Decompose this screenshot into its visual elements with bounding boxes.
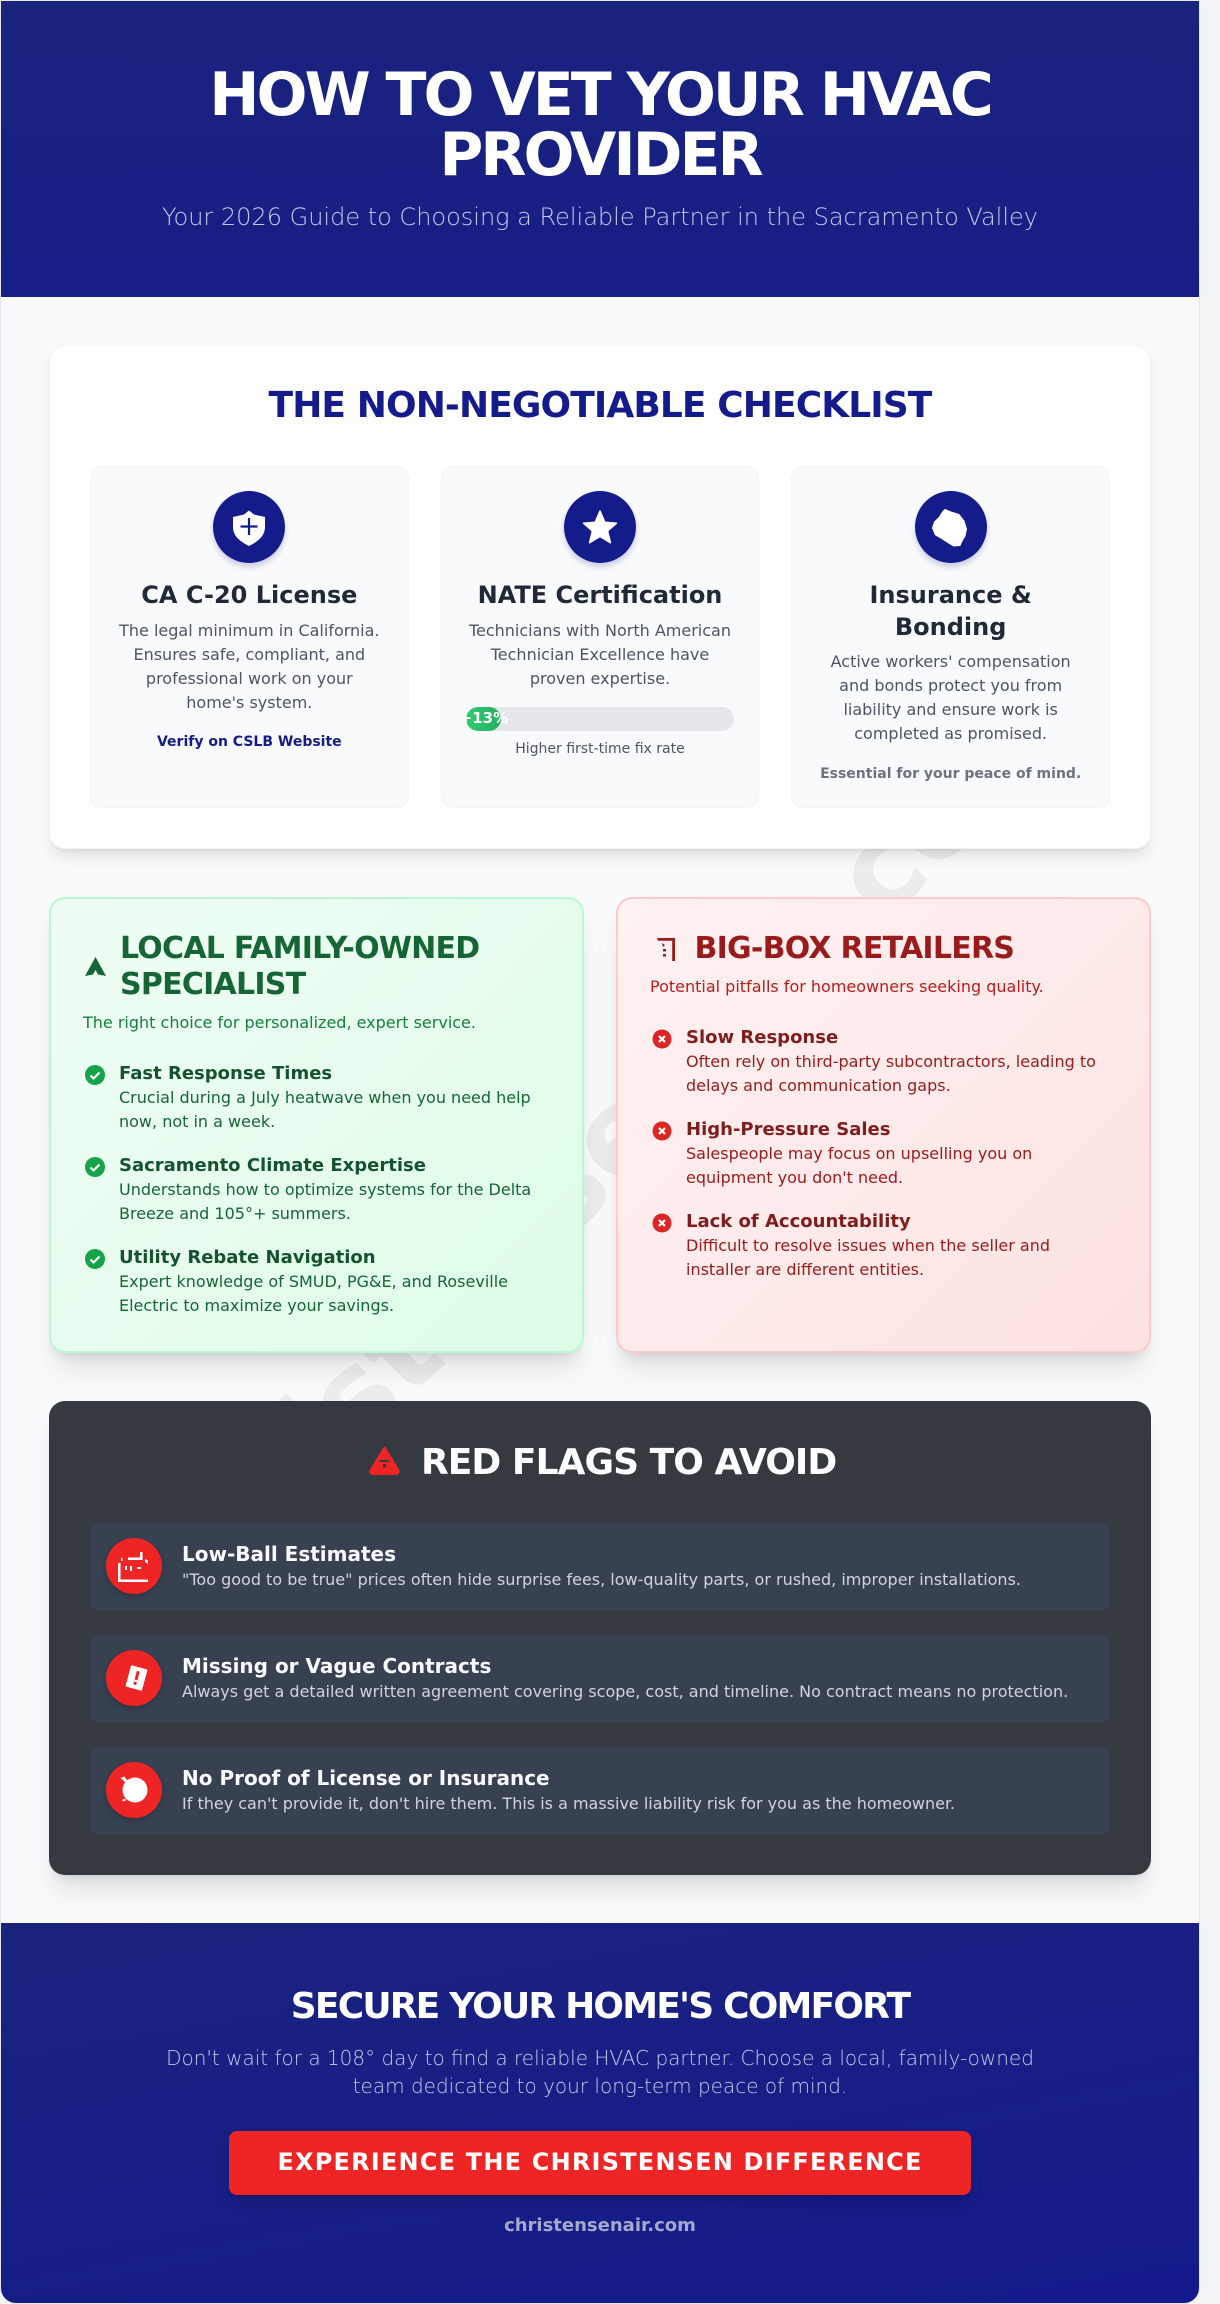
item: lack of accountability	[652, 1211, 1050, 1279]
card title: CA C-20 License	[141, 581, 357, 609]
footer heading: SECURE YOUR HOME'S COMFORT	[291, 1986, 909, 2027]
watermark: christensenair.com	[98, 650, 1101, 1653]
panel heading: SPECIALIST	[120, 967, 305, 1002]
flag: low-ball estimates	[90, 1522, 1110, 1610]
item text: Electric to maximize your savings.	[119, 1296, 394, 1315]
subtitle: Your 2026 Guide to Choosing a Reliable Partner in the Sacramento Valley	[162, 203, 1038, 231]
card description	[830, 652, 1071, 743]
icon: check	[85, 1249, 105, 1269]
icon: blocked badge	[106, 1762, 162, 1818]
panel subtitle: The right choice for personalized, expert service.	[83, 1013, 476, 1032]
icon: shield with plus	[213, 491, 285, 563]
card description: professional work on your	[146, 669, 353, 688]
flag text: Always get a detailed written agreement covering scope, cost, and timeline. No contract means no protection.	[182, 1682, 1068, 1701]
item text: Breeze and 105°+ summers.	[119, 1204, 351, 1223]
panel: big-box retailers	[616, 897, 1151, 1353]
item text	[686, 1144, 1032, 1187]
flag title: No Proof of License or Insurance	[182, 1766, 550, 1790]
website: christensenair.com	[504, 2215, 696, 2236]
card description: Ensures safe, compliant, and	[133, 645, 365, 664]
icon: x	[652, 1122, 672, 1140]
icon: check	[85, 1157, 105, 1177]
card note: Essential for your peace of mind.	[820, 766, 1081, 782]
flag title: Low-Ball Estimates	[182, 1542, 396, 1566]
panel: non-negotiable checklist	[49, 345, 1151, 849]
title: HOW TO VET YOUR HVAC	[209, 60, 991, 130]
item text: Expert knowledge of SMUD, PG&E, and Roseville	[119, 1272, 508, 1291]
flag: vague contracts	[90, 1634, 1110, 1722]
item text: Difficult to resolve issues when the seller and	[686, 1236, 1050, 1255]
card: insurance and bonding	[791, 466, 1110, 808]
card description	[468, 621, 731, 688]
flag text: "Too good to be true" prices often hide surprise fees, low-quality parts, or rushed, improper installations.	[182, 1570, 1021, 1589]
item title: Utility Rebate Navigation	[119, 1247, 376, 1268]
card description: The legal minimum in California.	[119, 621, 380, 640]
footer text: team dedicated to your long-term peace of mind.	[353, 2074, 847, 2098]
panel heading	[120, 931, 479, 1002]
icon: broken store	[657, 938, 675, 961]
card description: home's system.	[186, 693, 312, 712]
card description: and bonds protect you from	[839, 676, 1062, 695]
icon: check	[85, 1065, 105, 1085]
title	[209, 60, 991, 190]
item text	[119, 1180, 531, 1223]
card description: Technicians with North American	[469, 621, 731, 640]
panel heading: BIG-BOX RETAILERS	[694, 931, 1014, 966]
panel heading: LOCAL FAMILY-OWNED	[120, 931, 479, 966]
card description: completed as promised.	[854, 724, 1047, 743]
flag title: Missing or Vague Contracts	[182, 1654, 491, 1678]
icon: document	[106, 1650, 162, 1706]
footer text	[166, 2046, 1034, 2098]
card title	[870, 581, 1032, 641]
item text: now, not in a week.	[119, 1112, 275, 1131]
item title: Sacramento Climate Expertise	[119, 1155, 426, 1176]
item title: Fast Response Times	[119, 1063, 332, 1084]
card description	[119, 621, 380, 712]
item text: installer are different entities.	[686, 1260, 924, 1279]
card description: liability and ensure work is	[843, 700, 1058, 719]
item title: Lack of Accountability	[686, 1211, 911, 1232]
card title: NATE Certification	[478, 581, 722, 609]
panel: local family-owned specialist	[49, 897, 584, 1353]
card description: Active workers' compensation	[831, 652, 1071, 671]
panel heading: RED FLAGS TO AVOID	[421, 1442, 836, 1483]
icon: price tag	[106, 1538, 162, 1594]
item text	[686, 1236, 1050, 1279]
card: NATE certification	[441, 466, 759, 808]
item text: Salespeople may focus on upselling you on	[686, 1144, 1032, 1163]
button	[229, 2131, 971, 2195]
bar caption: Higher first-time fix rate	[515, 741, 685, 757]
item: slow response	[652, 1027, 1096, 1095]
item title: Slow Response	[686, 1027, 838, 1048]
checklist heading: THE NON-NEGOTIABLE CHECKLIST	[269, 385, 931, 426]
icon: green arrow	[85, 957, 106, 976]
card title: Bonding	[895, 613, 1006, 641]
item text	[686, 1052, 1096, 1095]
item text: Understands how to optimize systems for the Delta	[119, 1180, 531, 1199]
panel: red flags	[49, 1401, 1151, 1875]
flag: no proof of license	[90, 1746, 1110, 1834]
item text: Crucial during a July heatwave when you need help	[119, 1088, 531, 1107]
card title: Insurance &	[870, 581, 1032, 609]
card description: proven expertise.	[530, 669, 670, 688]
card description: Technician Excellence have	[491, 645, 709, 664]
item text	[119, 1088, 531, 1131]
item: climate expertise	[85, 1155, 531, 1223]
item title: High-Pressure Sales	[686, 1119, 890, 1140]
footer call to action	[1, 1923, 1199, 2303]
flag text: If they can't provide it, don't hire them. This is a massive liability risk for you as the homeowner.	[182, 1794, 955, 1813]
icon: x	[652, 1214, 672, 1232]
bar fill	[466, 707, 501, 731]
panel subtitle: Potential pitfalls for homeowners seeking quality.	[650, 977, 1044, 996]
card link: Verify on CSLB Website	[157, 734, 342, 750]
item text	[119, 1272, 508, 1315]
card: CA C-20 license	[90, 466, 409, 808]
item text: Often rely on third-party subcontractors, leading to	[686, 1052, 1096, 1071]
item: fast response	[85, 1063, 531, 1131]
icon: warning triangle	[369, 1446, 400, 1475]
progress bar: 13 percent	[466, 707, 734, 731]
item: rebate navigation	[85, 1247, 508, 1315]
item text: delays and communication gaps.	[686, 1076, 951, 1095]
footer text: Don't wait for a 108° day to find a reliable HVAC partner. Choose a local, family-owned	[166, 2046, 1034, 2070]
icon: x	[652, 1030, 672, 1048]
icon: star	[564, 491, 636, 563]
button: EXPERIENCE THE CHRISTENSEN DIFFERENCE	[277, 2148, 923, 2176]
item text: equipment you don't need.	[686, 1168, 903, 1187]
title: PROVIDER	[439, 120, 761, 190]
icon: blob	[915, 491, 987, 563]
header banner	[1, 1, 1199, 297]
item: high-pressure sales	[652, 1119, 1032, 1187]
